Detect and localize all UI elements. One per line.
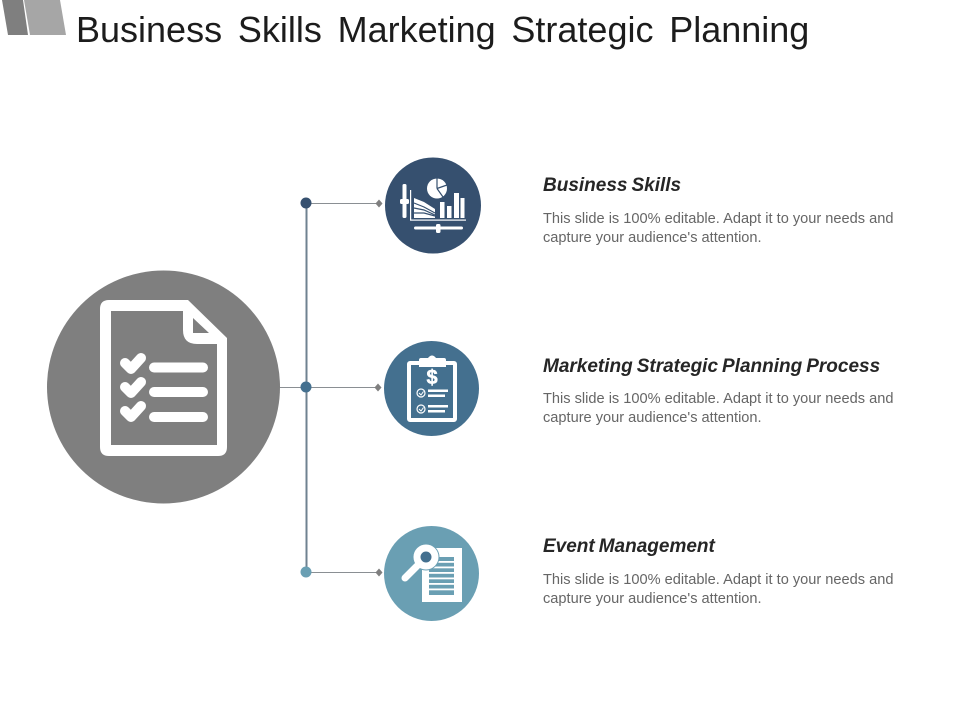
circle icon: business charts (385, 158, 481, 254)
circle icon: clipboard with dollar: $ (426, 367, 438, 389)
text: marketing description: capture your audience's attention. (543, 410, 762, 426)
text: business skills description: capture your audience's attention. (543, 230, 762, 246)
circle icon: clipboard with dollar (384, 341, 479, 436)
text: marketing description: This slide is 100% editable. Adapt it to your needs and (543, 391, 893, 407)
text: event management description (543, 572, 893, 607)
circle icon: magnifier and document (384, 526, 479, 621)
text: business skills description (543, 211, 893, 246)
header decoration (2, 0, 66, 35)
heading: marketing strategic planning process: Marketing Strategic Planning Process (543, 356, 880, 377)
heading: business skills: Business Skills (543, 175, 681, 196)
text: marketing description (543, 391, 893, 426)
connector lines (278, 198, 382, 578)
text: event management description: capture your audience's attention. (543, 591, 762, 607)
main circle with checklist document icon (47, 270, 280, 504)
title: Business Skills Marketing Strategic Planning (76, 9, 809, 50)
heading: event management: Event Management (543, 536, 715, 557)
text: event management description: This slide is 100% editable. Adapt it to your needs and (543, 572, 893, 588)
text: business skills description: This slide is 100% editable. Adapt it to your needs and (543, 211, 893, 227)
